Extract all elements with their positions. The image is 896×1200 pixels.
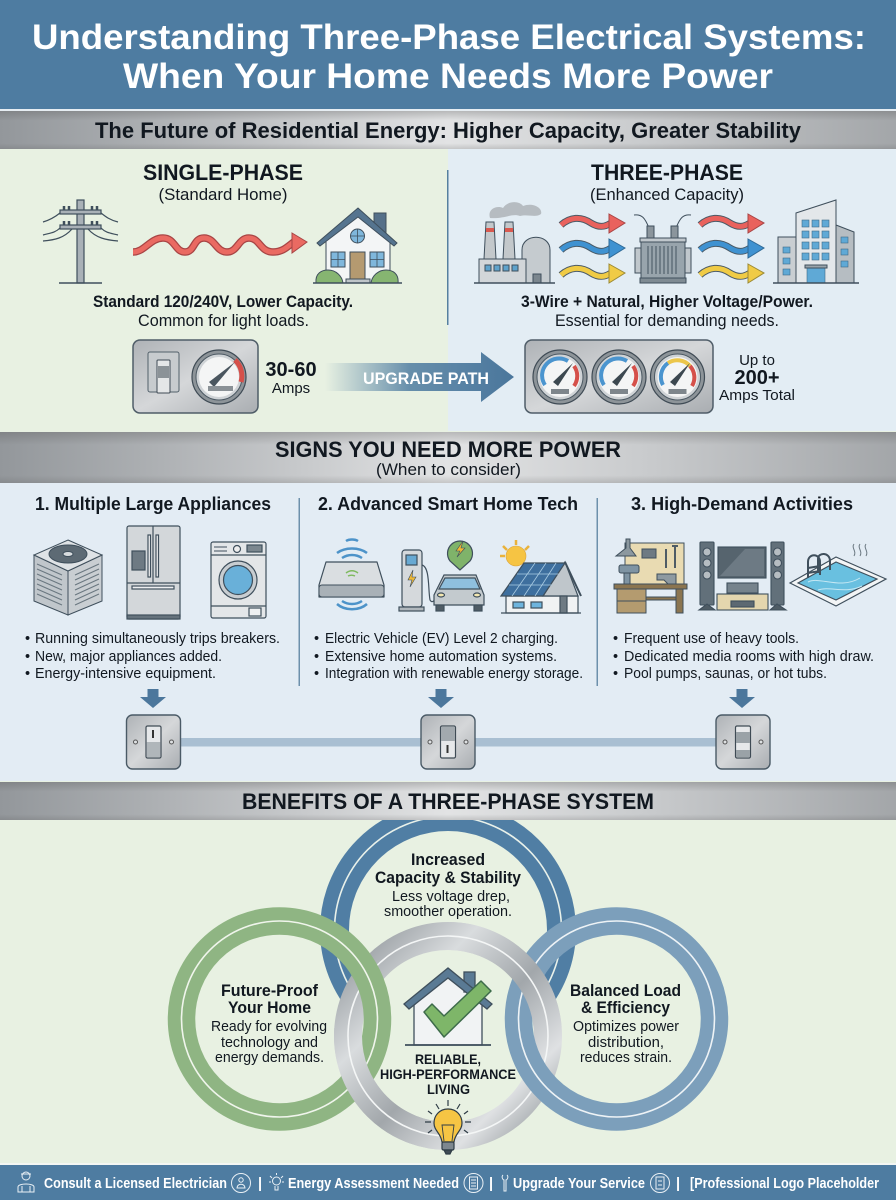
icon: electrician <box>18 1172 34 1192</box>
section heading band: signs you need more power <box>0 432 896 483</box>
icon: light bulb <box>425 1100 471 1154</box>
text: single-phase description: Standard 120/240V, Lower Capacity. <box>93 292 353 311</box>
section heading band: benefits <box>0 782 896 820</box>
section heading band: future of residential energy <box>0 111 896 149</box>
header banner <box>0 0 896 111</box>
ring: future-proof <box>182 921 378 1117</box>
text: footer call to action <box>44 1176 879 1192</box>
list: appliances bullets: Energy-intensive equipment. <box>35 666 216 682</box>
list: high-demand bullets: • <box>613 649 618 665</box>
text: increased capacity and stability: Capacity & Stability <box>375 869 522 887</box>
panel: benefits <box>168 820 728 1155</box>
text: 200+ amps: Up to <box>739 352 775 369</box>
text: balanced load and efficiency: Balanced Load <box>570 982 681 1000</box>
text: reliable high-performance living: LIVING <box>427 1081 470 1097</box>
text: 200+ amps: Amps Total <box>719 387 795 404</box>
list: high-demand bullets <box>613 631 874 682</box>
arrow: single-phase wave <box>133 233 307 253</box>
ring: reliable living <box>348 936 548 1136</box>
text: balanced load and efficiency: Optimizes power <box>573 1019 679 1035</box>
text: future-proof your home: Future-Proof <box>221 982 318 1000</box>
heading: three-phase: (Enhanced Capacity) <box>590 185 744 204</box>
icon: house with check mark <box>404 968 492 1045</box>
text: increased capacity and stability: Less voltage drep, <box>392 889 510 905</box>
icon: breaker and gauge panel <box>133 340 258 413</box>
ring: capacity and stability <box>334 816 562 1044</box>
title: Understanding Three-Phase Electrical Systems: <box>32 18 866 57</box>
list: appliances bullets: • <box>25 631 30 647</box>
list: smart home bullets: Integration with renewable energy storage. <box>325 666 583 682</box>
icon: utility pole <box>43 200 118 283</box>
arrow: down to switch 1 <box>140 689 166 708</box>
heading: single-phase: (Standard Home) <box>158 185 288 204</box>
list: high-demand bullets: Pool pumps, saunas, or hot tubs. <box>624 666 827 682</box>
column 2: smart home <box>314 494 583 682</box>
title: When Your Home Needs More Power <box>123 57 773 96</box>
list: appliances bullets: • <box>25 666 30 682</box>
icon: EV charger <box>399 550 436 611</box>
column 1: appliances <box>25 494 280 682</box>
text: 30-60 amps: 30-60 <box>265 359 317 381</box>
icon: workbench <box>614 539 687 613</box>
heading: multiple large appliances: 1. Multiple Large Appliances <box>35 494 271 514</box>
footer bar <box>0 1163 896 1200</box>
text: reliable high-performance living <box>380 1051 516 1097</box>
icon: washing machine <box>211 542 266 618</box>
section heading band: signs you need more power: SIGNS YOU NEED MORE POWER <box>275 437 621 462</box>
text: three-phase description <box>521 292 813 330</box>
icon: router with wifi <box>319 540 384 609</box>
list: smart home bullets: Extensive home automation systems. <box>325 649 557 665</box>
text: increased capacity and stability <box>375 851 522 920</box>
text: balanced load and efficiency: reduces strain. <box>580 1050 672 1066</box>
arrow: upgrade path <box>325 352 514 402</box>
text: balanced load and efficiency: & Efficiency <box>581 999 671 1017</box>
icon: person badge <box>232 1174 250 1192</box>
text: future-proof your home <box>211 982 327 1066</box>
heading: three-phase: THREE-PHASE <box>591 160 743 185</box>
heading: single-phase <box>143 160 303 204</box>
icon: switch 1 <box>126 715 180 769</box>
column 3: high-demand <box>613 494 886 682</box>
arrow: down to switch 3 <box>729 689 755 708</box>
text: footer call to action: | <box>489 1176 493 1192</box>
icon: transformer <box>634 215 691 283</box>
text: footer call to action: | <box>258 1176 262 1192</box>
icon: wrench <box>502 1175 508 1191</box>
arrows: three-phase output <box>700 214 764 283</box>
text: footer call to action: | <box>676 1176 680 1192</box>
text: future-proof your home: Ready for evolving <box>211 1019 327 1035</box>
icon: bulb outline <box>269 1173 284 1190</box>
text: future-proof your home: energy demands. <box>215 1050 324 1066</box>
icon: house <box>313 208 402 283</box>
text: reliable high-performance living: RELIABLE, <box>415 1051 481 1067</box>
heading: high-demand activities: 3. High-Demand Activities <box>631 494 853 514</box>
icon: switch 3 <box>716 715 770 769</box>
text: balanced load and efficiency <box>570 982 681 1066</box>
icon: AC unit <box>34 540 102 615</box>
text: three-phase description: 3-Wire + Natural, Higher Voltage/Power. <box>521 292 813 311</box>
text: footer call to action: Upgrade Your Service <box>513 1176 645 1192</box>
icon: refrigerator <box>127 526 180 619</box>
text: increased capacity and stability: smoother operation. <box>384 904 512 920</box>
icon: commercial building <box>773 200 859 283</box>
heading: three-phase <box>590 160 744 204</box>
list: appliances bullets <box>25 631 280 682</box>
diagram: interlocking benefit rings <box>182 816 714 1136</box>
icon: assessment badge <box>464 1174 483 1192</box>
icon: service badge <box>650 1174 670 1192</box>
text: 30-60 amps: Amps <box>272 380 310 397</box>
icon: swimming pool <box>790 544 886 606</box>
heading: single-phase: SINGLE-PHASE <box>143 160 303 185</box>
title <box>32 18 866 96</box>
section heading band: future of residential energy: The Future of Residential Energy: Higher Capacity, Greater Stability <box>95 118 802 143</box>
section heading band: signs you need more power: (When to consider) <box>376 461 521 479</box>
list: high-demand bullets: Dedicated media rooms with high draw. <box>624 649 874 665</box>
text: balanced load and efficiency: distribution, <box>588 1035 664 1051</box>
text: future-proof your home: Your Home <box>228 999 311 1017</box>
icon: solar house with sun <box>500 540 581 613</box>
list: appliances bullets: Running simultaneously trips breakers. <box>35 631 280 647</box>
text: single-phase description <box>93 292 353 330</box>
panel: single-phase <box>0 149 448 431</box>
text: three-phase description: Essential for demanding needs. <box>555 312 779 330</box>
divider between single and three phase <box>447 170 448 325</box>
connector line between switches <box>178 738 718 746</box>
arrows: three-phase input <box>561 214 625 283</box>
text: 30-60 amps <box>265 359 317 397</box>
panel: three-phase <box>448 149 896 431</box>
text: footer call to action: Consult a Licensed Electrician <box>44 1176 227 1192</box>
list: high-demand bullets: • <box>613 666 618 682</box>
icon: media system <box>699 542 786 610</box>
text: reliable high-performance living: HIGH-PERFORMANCE <box>380 1066 516 1082</box>
list: high-demand bullets: Frequent use of heavy tools. <box>624 631 799 647</box>
icon: three gauges panel <box>525 340 713 413</box>
icon: electric car with charge badge <box>434 541 484 611</box>
icon: switch 2 <box>421 715 475 769</box>
list: smart home bullets <box>314 631 583 682</box>
section heading band: benefits: BENEFITS OF A THREE-PHASE SYSTEM <box>242 789 654 814</box>
text: increased capacity and stability: Increased <box>411 851 485 869</box>
panel: signs <box>0 483 896 781</box>
text: future-proof your home: technology and <box>221 1035 318 1051</box>
list: smart home bullets: • <box>314 631 319 647</box>
arrow: upgrade path: UPGRADE PATH <box>363 369 489 388</box>
heading: advanced smart home tech: 2. Advanced Smart Home Tech <box>318 494 578 514</box>
ring: balanced load <box>518 921 714 1117</box>
arrow: down to switch 2 <box>428 689 454 708</box>
icon: power plant <box>474 202 555 283</box>
list: appliances bullets: New, major appliances added. <box>35 649 222 665</box>
text: 200+ amps <box>719 352 795 404</box>
list: high-demand bullets: • <box>613 631 618 647</box>
text: footer call to action: Energy Assessment Needed <box>288 1176 459 1192</box>
text: single-phase description: Common for light loads. <box>138 312 309 330</box>
text: 200+ amps: 200+ <box>734 367 780 389</box>
list: smart home bullets: Electric Vehicle (EV) Level 2 charging. <box>325 631 558 647</box>
list: smart home bullets: • <box>314 649 319 665</box>
list: appliances bullets: • <box>25 649 30 665</box>
list: smart home bullets: • <box>314 666 319 682</box>
